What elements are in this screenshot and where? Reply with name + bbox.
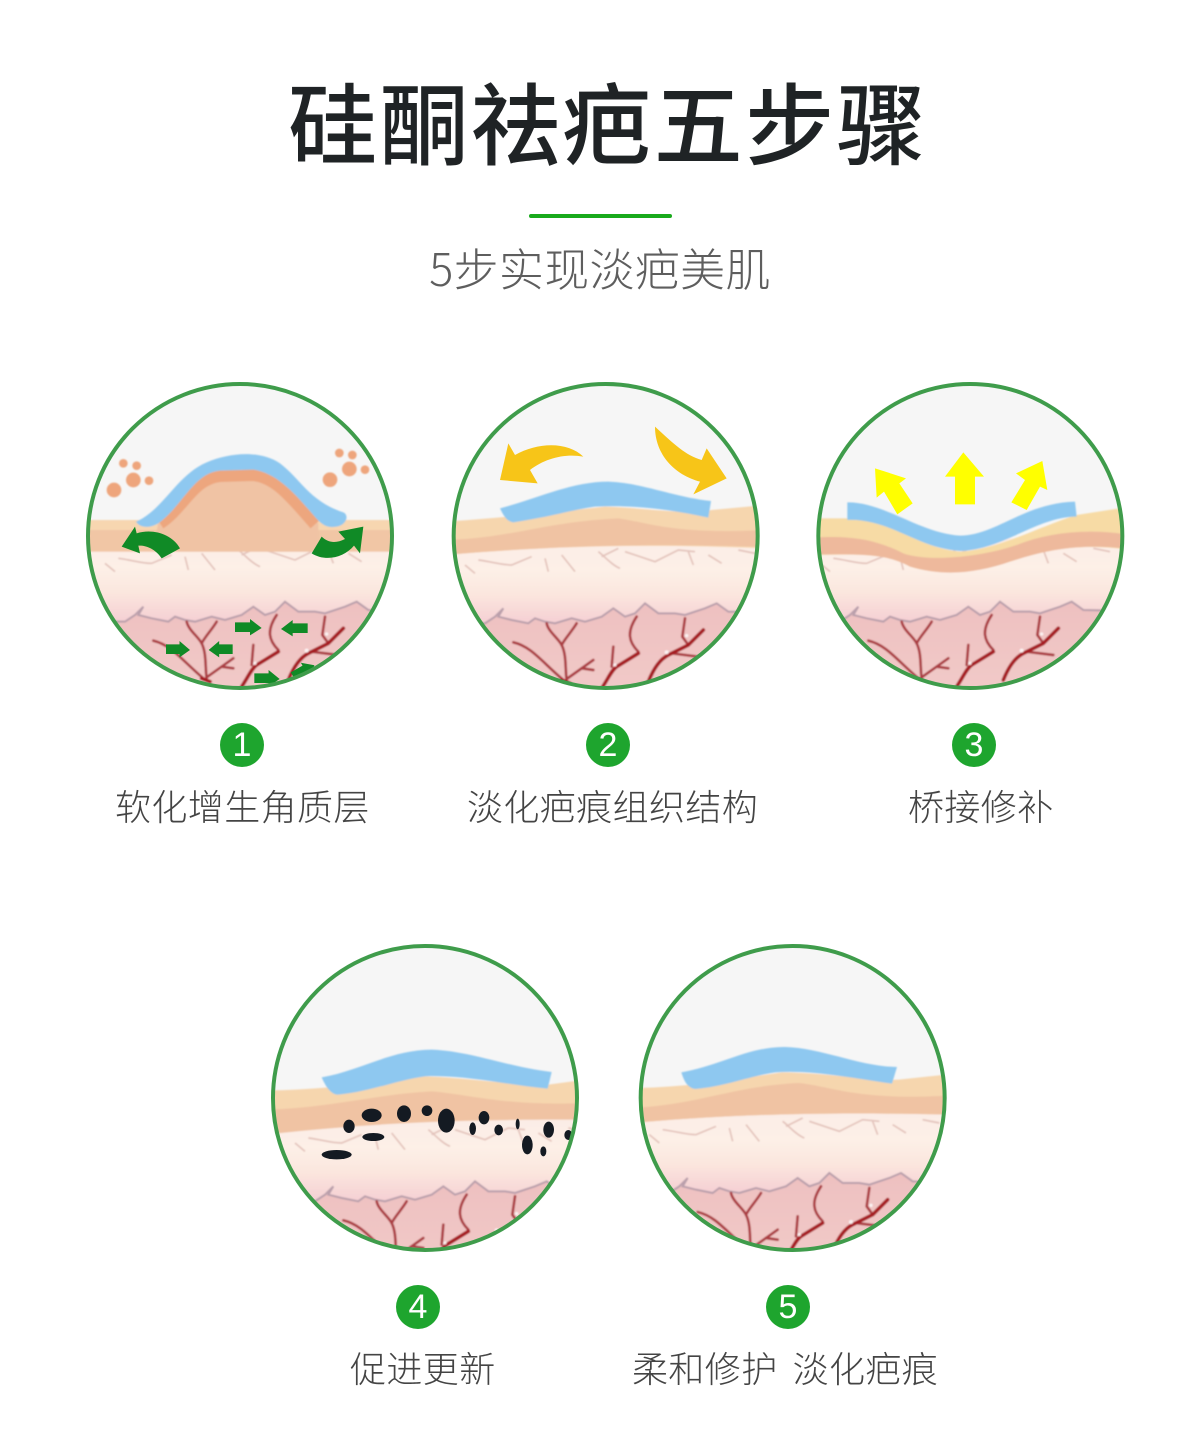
icon: yellow arrow right — [655, 427, 727, 494]
illustration: soften hyperplastic stratum corneum — [86, 382, 394, 690]
illustration: bridging repair — [816, 382, 1124, 690]
icon: yellow arrow up — [945, 452, 984, 504]
subtitle: 5步实现淡疤美肌 — [429, 234, 771, 299]
label: step 3: 桥接修补 — [908, 779, 1054, 831]
badge: 1: 1 — [233, 726, 251, 764]
illustration: gentle repair — [638, 944, 947, 1252]
panel: step 1 — [86, 382, 394, 831]
label: step 2: 淡化疤痕组织结构 — [467, 779, 758, 831]
illustration: promote renewal — [271, 944, 579, 1252]
title: 硅酮祛疤五步骤 — [288, 55, 928, 184]
panel: step 5 — [632, 944, 947, 1393]
badge: 3 — [952, 723, 996, 767]
badge: 4 — [396, 1285, 440, 1329]
panel: step 2 — [452, 382, 760, 831]
label: step 1: 软化增生角质层 — [115, 779, 370, 831]
icons: small green arrows — [166, 619, 318, 686]
illustration: fade scar tissue structure — [452, 382, 760, 690]
label: step 4: 促进更新 — [350, 1341, 496, 1393]
icon: green curved arrow left — [122, 527, 180, 558]
icon: green curved arrow right — [312, 527, 363, 558]
icon: yellow arrow up-right — [1011, 461, 1047, 510]
badge: 2 — [586, 723, 630, 767]
panel: step 3 — [816, 382, 1124, 831]
badge: 1 — [220, 723, 264, 767]
badge: 3: 3 — [965, 726, 983, 764]
badge: 5 — [766, 1285, 810, 1329]
badge: 2: 2 — [599, 726, 617, 764]
badge: 4: 4 — [409, 1288, 427, 1326]
black particles — [322, 1105, 572, 1159]
icon: yellow arrow left — [500, 443, 583, 483]
label: step 5: 柔和修护 淡化疤痕 — [632, 1341, 938, 1393]
icon: yellow arrow up-left — [875, 468, 913, 514]
badge: 5: 5 — [779, 1288, 797, 1326]
panel: step 4 — [271, 944, 579, 1393]
